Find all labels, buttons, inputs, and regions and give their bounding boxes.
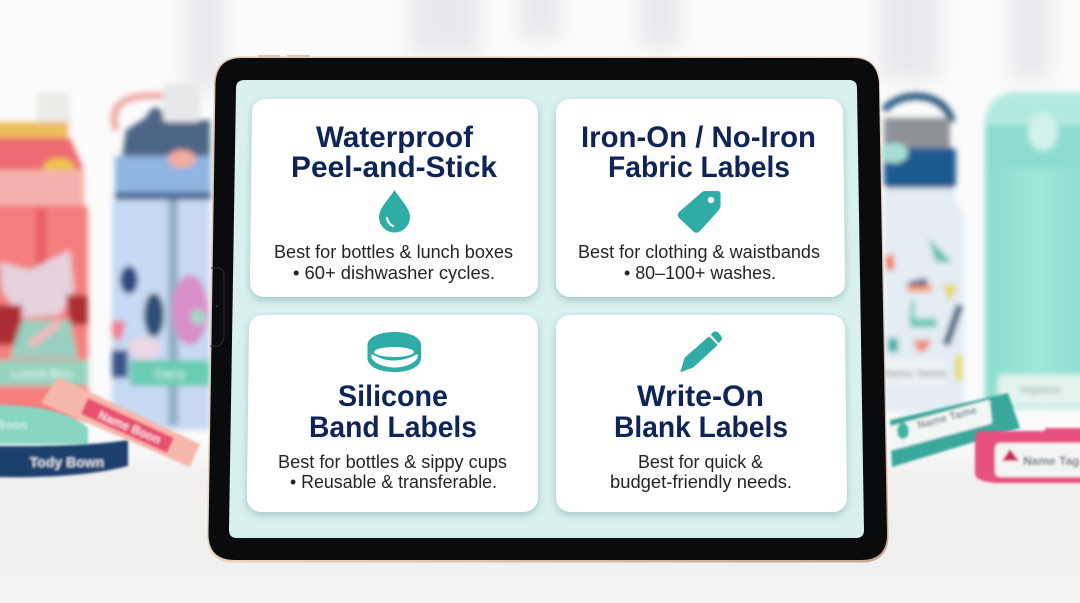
icon: silicone band bbox=[368, 332, 421, 372]
left bottle: pink unicorn bottle: Lunch Box bbox=[11, 367, 73, 381]
description: waterproof: Best for bottles & lunch boxes bbox=[274, 242, 513, 262]
left label: pink name band: Name Boon bbox=[96, 408, 163, 447]
left labels: teal and navy silicone bands: Tody Bown bbox=[30, 454, 104, 470]
description: silicone: Best for bottles & sippy cups bbox=[278, 452, 507, 472]
card: iron-on fabric labels bbox=[570, 113, 831, 283]
icon: pencil bbox=[681, 332, 722, 372]
card: silicone band labels bbox=[261, 329, 524, 498]
heading: iron-on: Iron-On / No-Iron bbox=[581, 121, 816, 154]
description: waterproof: • 60+ dishwasher cycles. bbox=[293, 263, 495, 283]
description: iron-on: • 80–100+ washes. bbox=[624, 263, 776, 283]
tablet screen bbox=[229, 80, 864, 538]
description: iron-on: Best for clothing & waistbands bbox=[578, 242, 820, 262]
tablet bbox=[207, 55, 888, 562]
heading: silicone: Silicone bbox=[338, 380, 448, 413]
description: write-on: Best for quick & bbox=[638, 452, 763, 472]
heading: iron-on: Fabric Labels bbox=[608, 151, 790, 184]
right bottle: mint flask: Organize bbox=[1019, 385, 1062, 396]
left bottle: blue bottle with pink handle bbox=[112, 84, 211, 430]
right bottle: mint flask bbox=[985, 92, 1080, 408]
heading: silicone: Band Labels bbox=[309, 411, 477, 444]
description: write-on: budget-friendly needs. bbox=[610, 472, 792, 492]
description: silicone: • Reusable & transferable. bbox=[290, 472, 497, 492]
right label: teal name band bbox=[890, 393, 1020, 467]
icon: water drop bbox=[379, 190, 410, 232]
right label: teal name band: Name Tame bbox=[916, 404, 978, 432]
heading: write-on: Blank Labels bbox=[614, 411, 788, 444]
icon: price tag bbox=[678, 191, 720, 233]
heading: waterproof: Peel-and-Stick bbox=[291, 151, 498, 184]
tablet frame bbox=[207, 55, 888, 562]
left bottle: pink unicorn bottle bbox=[0, 92, 88, 420]
card: write-on blank labels bbox=[570, 329, 833, 498]
right label: pink name band: Name Tag bbox=[1023, 454, 1079, 468]
heading: write-on: Write-On bbox=[637, 380, 764, 413]
heading: waterproof: Waterproof bbox=[316, 121, 473, 154]
right bottle: white dinosaur bottle: Name Name bbox=[884, 368, 946, 380]
left label: pink name band bbox=[41, 377, 200, 467]
card: waterproof peel-and-stick bbox=[264, 113, 524, 283]
left labels: teal and navy silicone bands bbox=[0, 405, 128, 477]
right label: pink name band bbox=[975, 428, 1080, 483]
left bottle: blue bottle with pink handle: Carry bbox=[154, 367, 186, 381]
right bottle: white dinosaur bottle bbox=[880, 96, 964, 412]
